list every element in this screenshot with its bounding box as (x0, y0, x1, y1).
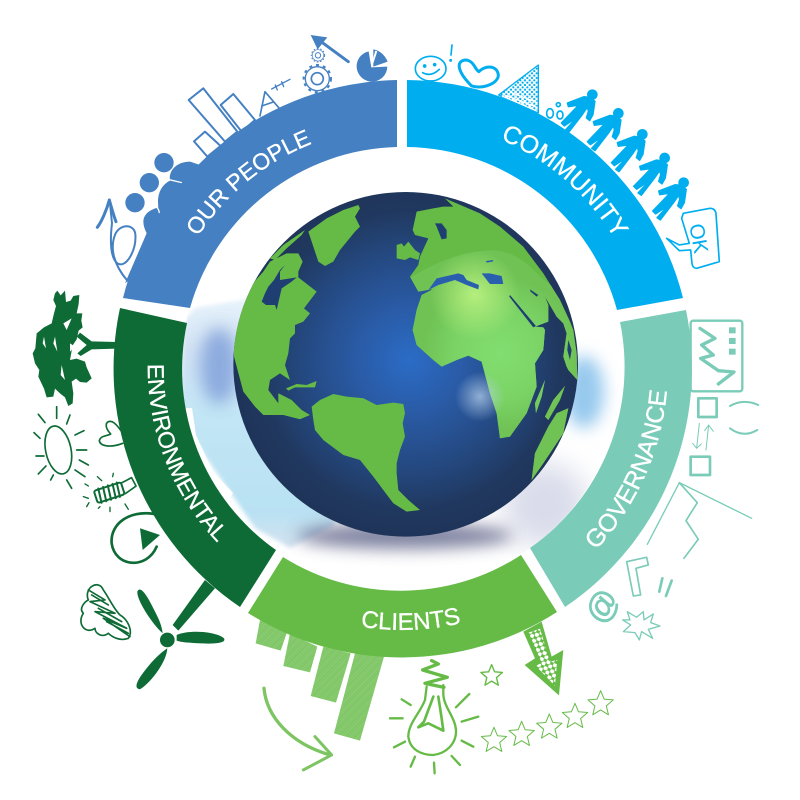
icon: pyramid (499, 65, 538, 113)
panel: clients (248, 555, 557, 658)
icon: sun (34, 407, 88, 488)
ocean highlight (457, 374, 503, 420)
panel: governance (530, 310, 692, 607)
icon: mountain line sketch (647, 483, 752, 558)
icon: arrow up-left (311, 35, 348, 62)
icon: starburst (623, 612, 660, 640)
ocean sphere (233, 192, 578, 537)
continents (234, 198, 587, 512)
globe (233, 192, 587, 537)
icon: OK speech bubble: OK (684, 222, 712, 255)
icon: equals sign (659, 578, 672, 596)
icon: small star (481, 665, 502, 685)
icon: parentheses (730, 402, 758, 434)
icon: tree (33, 291, 117, 406)
icon: OK speech bubble (667, 208, 719, 268)
heading: governance: GOVERNANCE (586, 390, 668, 546)
icon: row of people holding hands (561, 90, 688, 220)
icon: hatched bar chart (256, 620, 384, 741)
icon: group of people (125, 153, 205, 283)
icon: heart (459, 60, 498, 87)
icon: line chart screen (691, 321, 742, 391)
icon: scribbled cloud (81, 585, 130, 639)
icon: squares and arrows (691, 398, 717, 475)
panel: environmental (114, 308, 276, 607)
panel: community (407, 80, 683, 310)
icon: row of five stars (481, 691, 613, 751)
heading: clients: CLIENTS (362, 608, 460, 630)
icon: small heart (99, 421, 123, 446)
icon: bubbles (547, 103, 563, 119)
icon: light bulb (390, 661, 478, 773)
panel: our people (123, 80, 397, 308)
icon: swirl arrow (97, 200, 135, 281)
icon: angle bracket (627, 557, 648, 596)
icon: at sign: @ (578, 583, 627, 630)
icon: circular arrow (112, 513, 160, 563)
icons: governance (578, 321, 758, 640)
icons: clients (256, 620, 613, 773)
icon: smiley (415, 56, 446, 81)
icon: wind turbine (136, 580, 224, 689)
icon: bar chart outline (189, 88, 255, 157)
icon: letter A with plus signs (260, 79, 290, 116)
icon: dotted down arrow (523, 622, 563, 695)
icons: community (415, 45, 563, 119)
heading: community: COMMUNITY (504, 126, 630, 233)
icons: environmental (33, 291, 224, 689)
icon: exclamation mark (450, 45, 452, 61)
background glow behind globe (180, 300, 604, 549)
icon: gears (304, 49, 331, 92)
heading: our people: OUR PEOPLE (188, 129, 312, 234)
icon: pie chart (357, 49, 388, 82)
inland seas (262, 223, 572, 360)
icon: curved hand-drawn arrow (264, 688, 332, 770)
heading: environmental: ENVIRONMENTAL (148, 366, 224, 542)
icons: our people (97, 35, 388, 283)
icon: energy-saving bulb (83, 473, 138, 512)
